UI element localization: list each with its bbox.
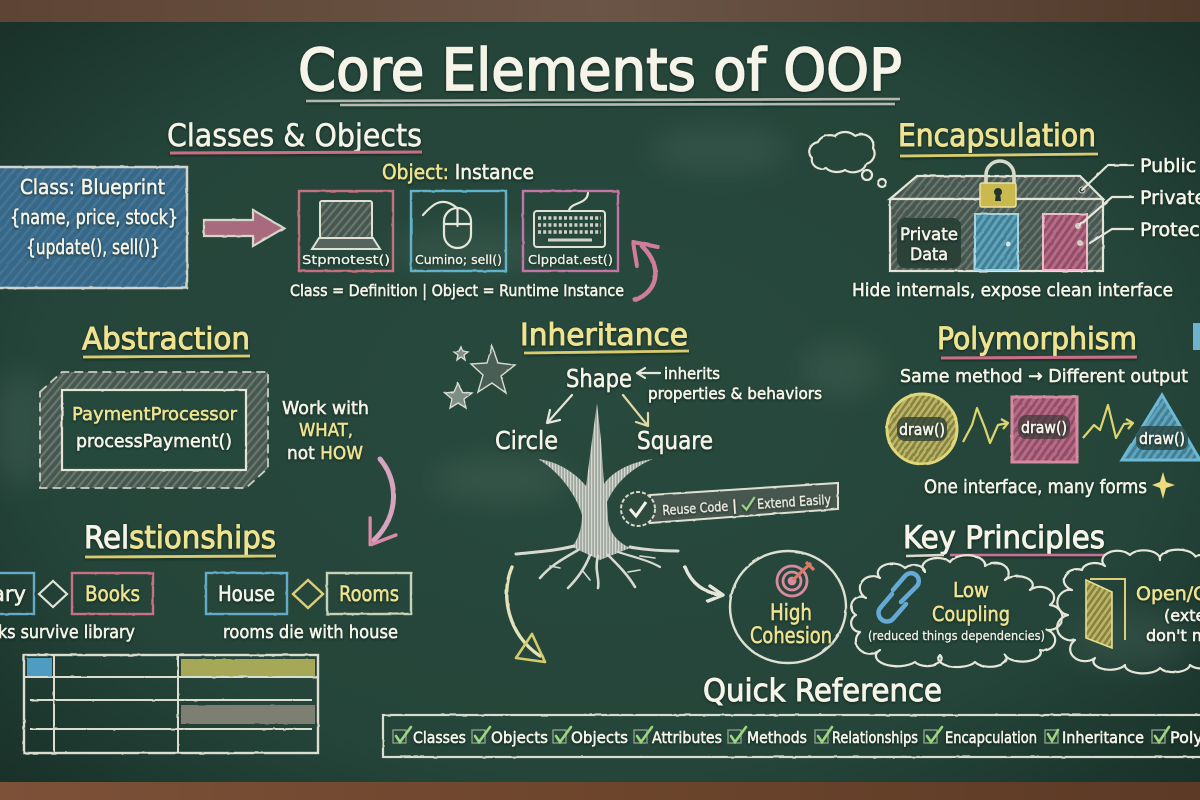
caption: one interface: One interface, many forms xyxy=(924,476,1147,498)
principle: open closed xyxy=(1057,550,1200,673)
principle: high cohesion: Cohesion xyxy=(750,624,832,649)
note: what not how: not HOW xyxy=(287,443,363,464)
label: private data xyxy=(900,225,958,265)
class blueprint box: Class: Blueprint xyxy=(20,175,165,199)
label: object instance: Object: Instance xyxy=(382,160,534,184)
principle: high cohesion: High xyxy=(770,601,812,626)
panel: abstraction xyxy=(40,322,396,545)
icon: corner tab xyxy=(1193,323,1200,350)
panel: key principles xyxy=(685,520,1200,673)
aggregation: library and books xyxy=(0,573,153,643)
label: private data: Private xyxy=(900,225,958,245)
icon: target xyxy=(777,562,814,596)
arrow: curved yellow xyxy=(507,567,545,662)
aggregation: library and books: Books xyxy=(85,582,140,606)
checklist items: Encapculation xyxy=(945,728,1037,747)
class blueprint box: {name, price, stock} xyxy=(10,205,178,229)
caption: encapsulation: Hide internals, expose clean interface xyxy=(852,280,1173,301)
icon: door xyxy=(1086,579,1125,648)
heading: abstraction: Abstraction xyxy=(82,322,250,357)
class hierarchy xyxy=(495,364,822,455)
note: what not how xyxy=(282,398,369,464)
arrow: curved pink xyxy=(370,459,396,545)
label: private data: Data xyxy=(910,245,948,265)
object card: keyboard: Clppdat.est() xyxy=(528,252,613,267)
object card: laptop: Stpmotest() xyxy=(302,252,390,267)
panel: inheritance xyxy=(445,318,838,588)
caption: class vs object: Class = Definition | Object = Runtime Instance xyxy=(290,281,624,300)
shape: circle draw xyxy=(887,394,957,464)
icon: keyboard xyxy=(534,193,605,247)
object card: keyboard xyxy=(523,191,618,271)
illustration: chalk tree xyxy=(516,403,678,588)
checklist items: Methods xyxy=(747,728,807,747)
abstract class box xyxy=(40,372,268,488)
shape: circle draw: draw() xyxy=(899,420,945,439)
wood frame top xyxy=(0,0,1200,22)
panel: relationships xyxy=(0,520,545,753)
heading: key principles: Key Principles xyxy=(903,520,1105,556)
panel: encapsulation xyxy=(809,118,1200,301)
icons: stars xyxy=(445,346,515,408)
arrow: squiggle two xyxy=(1083,405,1133,438)
arrow: squiggle one xyxy=(963,408,1008,443)
heading: quick reference: Quick Reference xyxy=(703,673,942,709)
class hierarchy: inherits xyxy=(664,364,720,383)
principle: low coupling: (reduced things dependencies) xyxy=(868,628,1045,643)
title: Core Elements of OOP xyxy=(298,36,902,104)
icon: sparkle xyxy=(1152,472,1175,499)
abstract class box: processPayment() xyxy=(76,431,232,452)
composition: house and rooms: rooms die with house xyxy=(223,622,398,643)
checklist items xyxy=(393,727,1200,747)
note: what not how: WHAT, xyxy=(299,420,353,441)
illustration: encapsulation box xyxy=(890,176,1103,271)
heading: polymorphism: Polymorphism xyxy=(937,322,1137,357)
icon: padlock xyxy=(980,161,1016,207)
panel: polymorphism xyxy=(887,322,1200,499)
checklist items: Objects xyxy=(491,728,548,747)
caption: same method: Same method → Different output xyxy=(900,366,1188,387)
composition: house and rooms xyxy=(206,573,411,643)
composition: house and rooms: Rooms xyxy=(339,582,399,606)
composition: house and rooms: House xyxy=(218,582,275,606)
wood frame bottom xyxy=(0,782,1200,800)
arrow: curved pink xyxy=(633,242,658,300)
class hierarchy: Square xyxy=(637,426,713,455)
access labels xyxy=(1140,155,1200,241)
principle: low coupling xyxy=(851,555,1062,667)
principle: low coupling: Coupling xyxy=(932,602,1010,626)
shape: square draw: draw() xyxy=(1021,418,1067,437)
checklist items: Inheritance xyxy=(1062,728,1144,747)
panel: classes and objects xyxy=(0,118,658,300)
checklist box xyxy=(383,715,1200,757)
aggregation: library and books: ks survive library xyxy=(0,622,135,643)
badge: reuse and extend: Extend Easily xyxy=(757,492,832,513)
heading: classes and objects: Classes & Objects xyxy=(167,118,422,154)
icon: laptop xyxy=(312,201,380,249)
checklist items: Classes xyxy=(413,728,466,747)
abstract class box: PaymentProcessor xyxy=(72,404,238,425)
arrow: class to object xyxy=(204,210,284,246)
heading: encapsulation: Encapsulation xyxy=(898,118,1096,154)
badge: reuse and extend xyxy=(621,483,838,526)
icon: broken link xyxy=(879,573,919,621)
class hierarchy: Circle xyxy=(495,426,558,455)
panel: quick reference xyxy=(383,673,1200,757)
icon: thought cloud xyxy=(809,132,886,187)
note: what not how: Work with xyxy=(282,398,369,419)
object card: mouse: Cumino; sell() xyxy=(415,252,502,267)
object card: mouse xyxy=(411,191,506,271)
heading: inheritance: Inheritance xyxy=(520,318,688,353)
badge: reuse and extend: Reuse Code xyxy=(662,499,729,519)
class hierarchy: properties & behaviors xyxy=(648,384,822,403)
principle: high cohesion xyxy=(730,551,846,663)
shape: triangle draw: draw() xyxy=(1139,429,1185,448)
icon: mouse xyxy=(423,202,471,248)
checklist items: Relationships xyxy=(832,728,918,747)
class blueprint box: {update(), sell()} xyxy=(26,235,160,259)
shape: square draw xyxy=(1012,397,1077,462)
checklist items: Attributes xyxy=(652,728,722,747)
badge: reuse and extend: | xyxy=(732,498,737,515)
callout lines xyxy=(1080,165,1133,243)
checklist items: Objects xyxy=(571,728,628,747)
class hierarchy: Shape xyxy=(566,364,632,393)
shape: triangle draw xyxy=(1122,395,1200,460)
principle: low coupling: Low xyxy=(953,578,989,602)
heading: relationships: Relstionships xyxy=(84,520,276,556)
arrow: to high cohesion xyxy=(685,567,723,601)
class blueprint box xyxy=(0,167,187,288)
object card: laptop xyxy=(299,191,393,271)
empty reference table xyxy=(24,655,318,753)
